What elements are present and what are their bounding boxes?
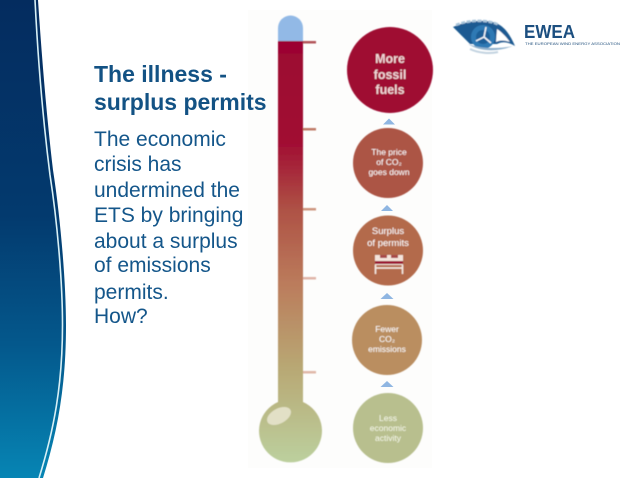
circle: less economic activity [353,393,423,463]
title: The illness - [94,61,227,87]
circle: the price of CO2 goes down: of CO₂ [376,157,402,167]
circle: more fossil fuels [347,27,433,113]
icon: bed [375,255,403,274]
title [94,61,267,115]
circle: less economic activity: Less [379,413,397,423]
body text: How? [94,305,148,328]
logo tagline: THE EUROPEAN WIND ENERGY ASSOCIATION [525,41,620,46]
circle: the price of CO2 goes down: goes down [368,167,410,177]
circle: fewer CO2 emissions: emissions [368,344,406,354]
body text: permits. [94,281,169,304]
circle: surplus of permits: Surplus [372,226,404,237]
arrow [381,205,393,211]
circle: surplus of permits [353,216,423,286]
thermometer [259,16,322,462]
circle: more fossil fuels: fossil [374,68,406,82]
circle: the price of CO2 goes down: The price [371,147,407,157]
body text: crisis has [94,153,182,176]
circle: surplus of permits: of permits [367,238,409,249]
body text: The economic [94,128,226,151]
body text: ETS by bringing [94,204,243,227]
circle: less economic activity: economic [370,423,407,433]
circle: fewer CO2 emissions: Fewer [375,324,399,334]
circle: the price of CO2 goes down [353,128,423,198]
arrow [380,381,394,387]
circle: fewer CO2 emissions [352,305,422,375]
body text: about a surplus [94,230,238,253]
logo wordmark: EWEA [524,22,575,42]
circle: less economic activity: activity [375,433,402,443]
title: surplus permits [94,89,267,115]
circle: more fossil fuels: fuels [375,83,405,97]
circle: fewer CO2 emissions: CO₂ [379,334,395,344]
circle: more fossil fuels: More [375,52,405,66]
arrow [383,118,395,124]
icon: eye [453,21,515,53]
arrow [380,293,394,299]
body text [94,128,243,328]
body text: of emissions [94,254,211,277]
body text: undermined the [94,179,240,202]
